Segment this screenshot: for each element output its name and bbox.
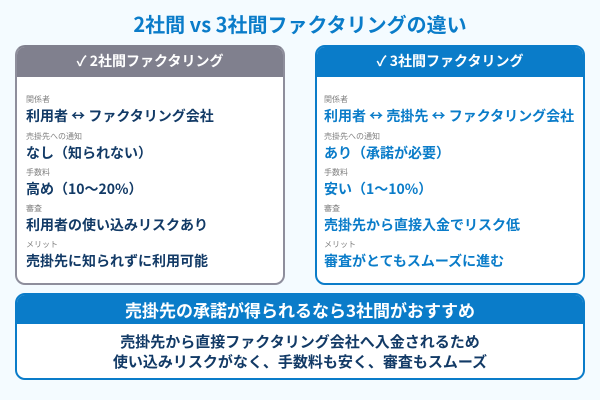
value: merit: 売掛先に知られずに利用可能	[26, 251, 208, 271]
value: fee: 高め（10〜20%）	[26, 179, 143, 199]
panel: recommendation	[15, 293, 585, 380]
label: notice: 売掛先への通知	[26, 131, 82, 142]
label: fee: 手数料	[324, 167, 348, 178]
label: review: 審査	[26, 203, 42, 214]
label: review: 審査	[324, 203, 340, 214]
value: review: 利用者の使い込みリスクあり	[26, 215, 208, 235]
recommendation text: 使い込みリスクがなく、手数料も安く、審査もスムーズ	[113, 351, 487, 372]
label: notice: 売掛先への通知	[324, 131, 380, 142]
panel heading: 2-party: ✓ 2社間ファクタリング	[76, 51, 224, 71]
recommendation heading	[17, 295, 583, 324]
label: fee: 手数料	[26, 167, 50, 178]
label: parties: 関係者	[324, 94, 348, 105]
panel: 2-party factoring	[15, 45, 285, 285]
value: parties: 利用者 ↔ ファクタリング会社	[26, 106, 214, 126]
value: parties: 利用者 ↔ 売掛先 ↔ ファクタリング会社	[324, 106, 574, 126]
recommendation heading: 売掛先の承諾が得られるなら3社間がおすすめ	[125, 297, 475, 322]
title: 2社間 vs 3社間ファクタリングの違い	[133, 9, 467, 38]
panel heading: 2-party	[17, 47, 283, 77]
recommendation text	[113, 331, 487, 372]
value: notice: なし（知られない）	[26, 143, 152, 163]
panel heading: 3-party	[317, 47, 583, 77]
label: parties: 関係者	[26, 94, 50, 105]
panel heading: 3-party: ✓ 3社間ファクタリング	[376, 51, 524, 71]
recommendation text: 売掛先から直接ファクタリング会社へ入金されるため	[120, 331, 480, 352]
panel: 3-party factoring	[315, 45, 585, 285]
value: merit: 審査がとてもスムーズに進む	[324, 251, 504, 271]
label: merit: メリット	[324, 239, 356, 250]
label: merit: メリット	[26, 239, 58, 250]
value: fee: 安い（1〜10%）	[324, 179, 432, 199]
value: review: 売掛先から直接入金でリスク低	[324, 215, 520, 235]
value: notice: あり（承諾が必要）	[324, 143, 450, 163]
